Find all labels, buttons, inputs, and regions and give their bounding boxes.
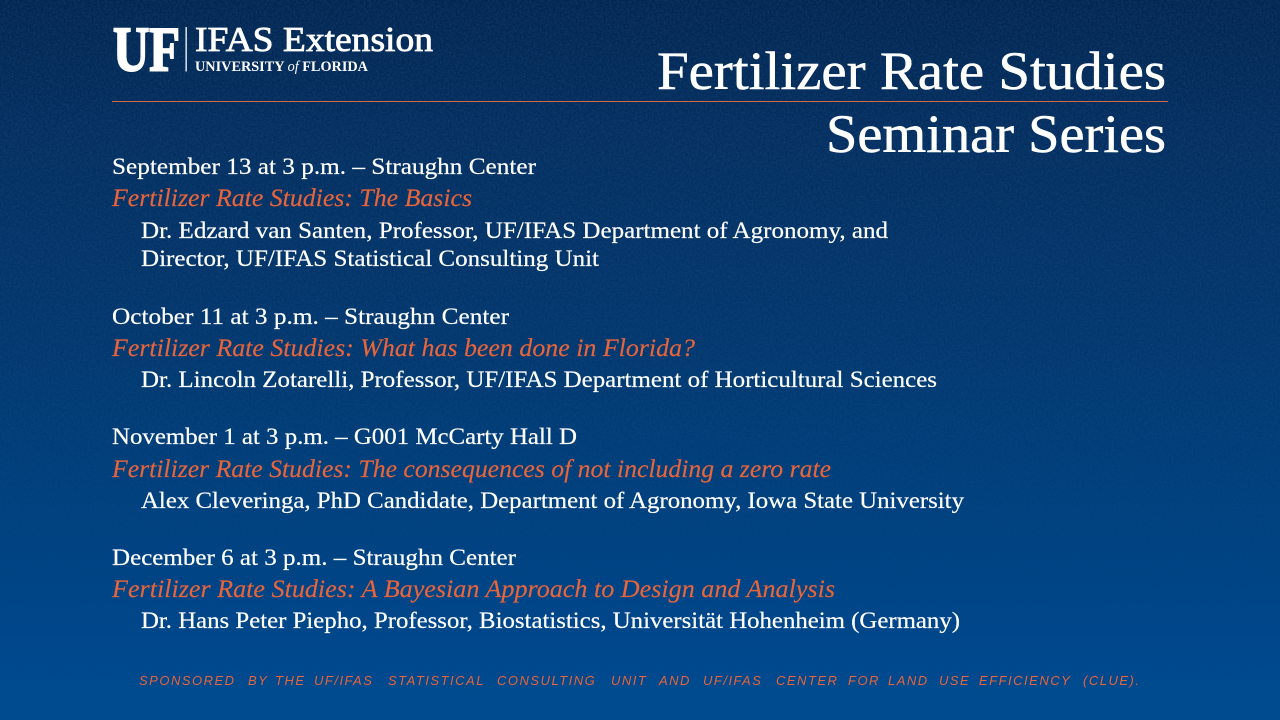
seminar 3: November 1: Fertilizer Rate Studies: The consequences of not including a zero rate xyxy=(111,456,831,483)
sponsor footer: EFFICIENCY xyxy=(979,673,1076,688)
sponsor footer: AND xyxy=(658,673,696,688)
seminar 1: September 13 xyxy=(111,154,888,272)
sponsor footer: (CLUE). xyxy=(1083,673,1140,688)
seminar 1: September 13: Fertilizer Rate Studies: The Basics xyxy=(111,185,472,212)
seminar 4: December 6 xyxy=(111,545,960,634)
logo: UF/IFAS Extension xyxy=(113,14,433,84)
seminar 4: December 6: December 6 at 3 p.m. – Straughn Center xyxy=(112,545,516,571)
seminar 4: December 6: Fertilizer Rate Studies: A Bayesian Approach to Design and Analysis xyxy=(111,576,835,603)
title: Seminar Series xyxy=(826,104,1166,164)
seminar 1: September 13: Director, UF/IFAS Statistical Consulting Unit xyxy=(141,246,599,272)
sponsor footer: UNIT xyxy=(611,673,652,688)
seminar 2: October 11 xyxy=(111,304,937,393)
sponsor footer: SPONSORED xyxy=(139,673,241,688)
title: Fertilizer Rate Studies xyxy=(657,41,1166,101)
seminar 2: October 11: Fertilizer Rate Studies: What has been done in Florida? xyxy=(111,335,696,362)
seminar 1: September 13: September 13 at 3 p.m. – Straughn Center xyxy=(112,154,536,180)
seminar 4: December 6: Dr. Hans Peter Piepho, Professor, Biostatistics, Universität Hohenheim (Germany) xyxy=(141,608,960,634)
seminar 3: November 1 xyxy=(111,424,964,514)
logo: UF/IFAS Extension: UNIVERSITY of FLORIDA xyxy=(195,59,369,75)
seminar 3: November 1: November 1 at 3 p.m. – G001 McCarty Hall D xyxy=(112,424,577,450)
sponsor footer: UF/IFAS xyxy=(703,673,767,688)
title xyxy=(657,41,1166,164)
seminar 1: September 13: Dr. Edzard van Santen, Professor, UF/IFAS Department of Agronomy, and xyxy=(141,218,888,244)
logo: UF/IFAS Extension: UF xyxy=(113,14,180,84)
seminar 3: November 1: Alex Cleveringa, PhD Candidate, Department of Agronomy, Iowa State University xyxy=(141,488,964,514)
seminar 2: October 11: October 11 at 3 p.m. – Straughn Center xyxy=(112,304,509,330)
sponsor footer: CENTER xyxy=(776,673,844,688)
sponsor footer: THE xyxy=(275,673,311,688)
sponsor footer: STATISTICAL xyxy=(388,673,490,688)
divider xyxy=(112,101,1168,102)
seminar 2: October 11: Dr. Lincoln Zotarelli, Professor, UF/IFAS Department of Horticultural Sciences xyxy=(141,367,937,393)
sponsor footer: CONSULTING xyxy=(497,673,601,688)
sponsor footer: LAND xyxy=(888,673,934,688)
sponsor footer: USE xyxy=(939,673,975,688)
sponsor footer: BY xyxy=(248,673,273,688)
sponsor footer: FOR xyxy=(848,673,885,688)
sponsor footer: UF/IFAS xyxy=(314,673,378,688)
logo: UF/IFAS Extension: IFAS Extension xyxy=(195,20,433,59)
